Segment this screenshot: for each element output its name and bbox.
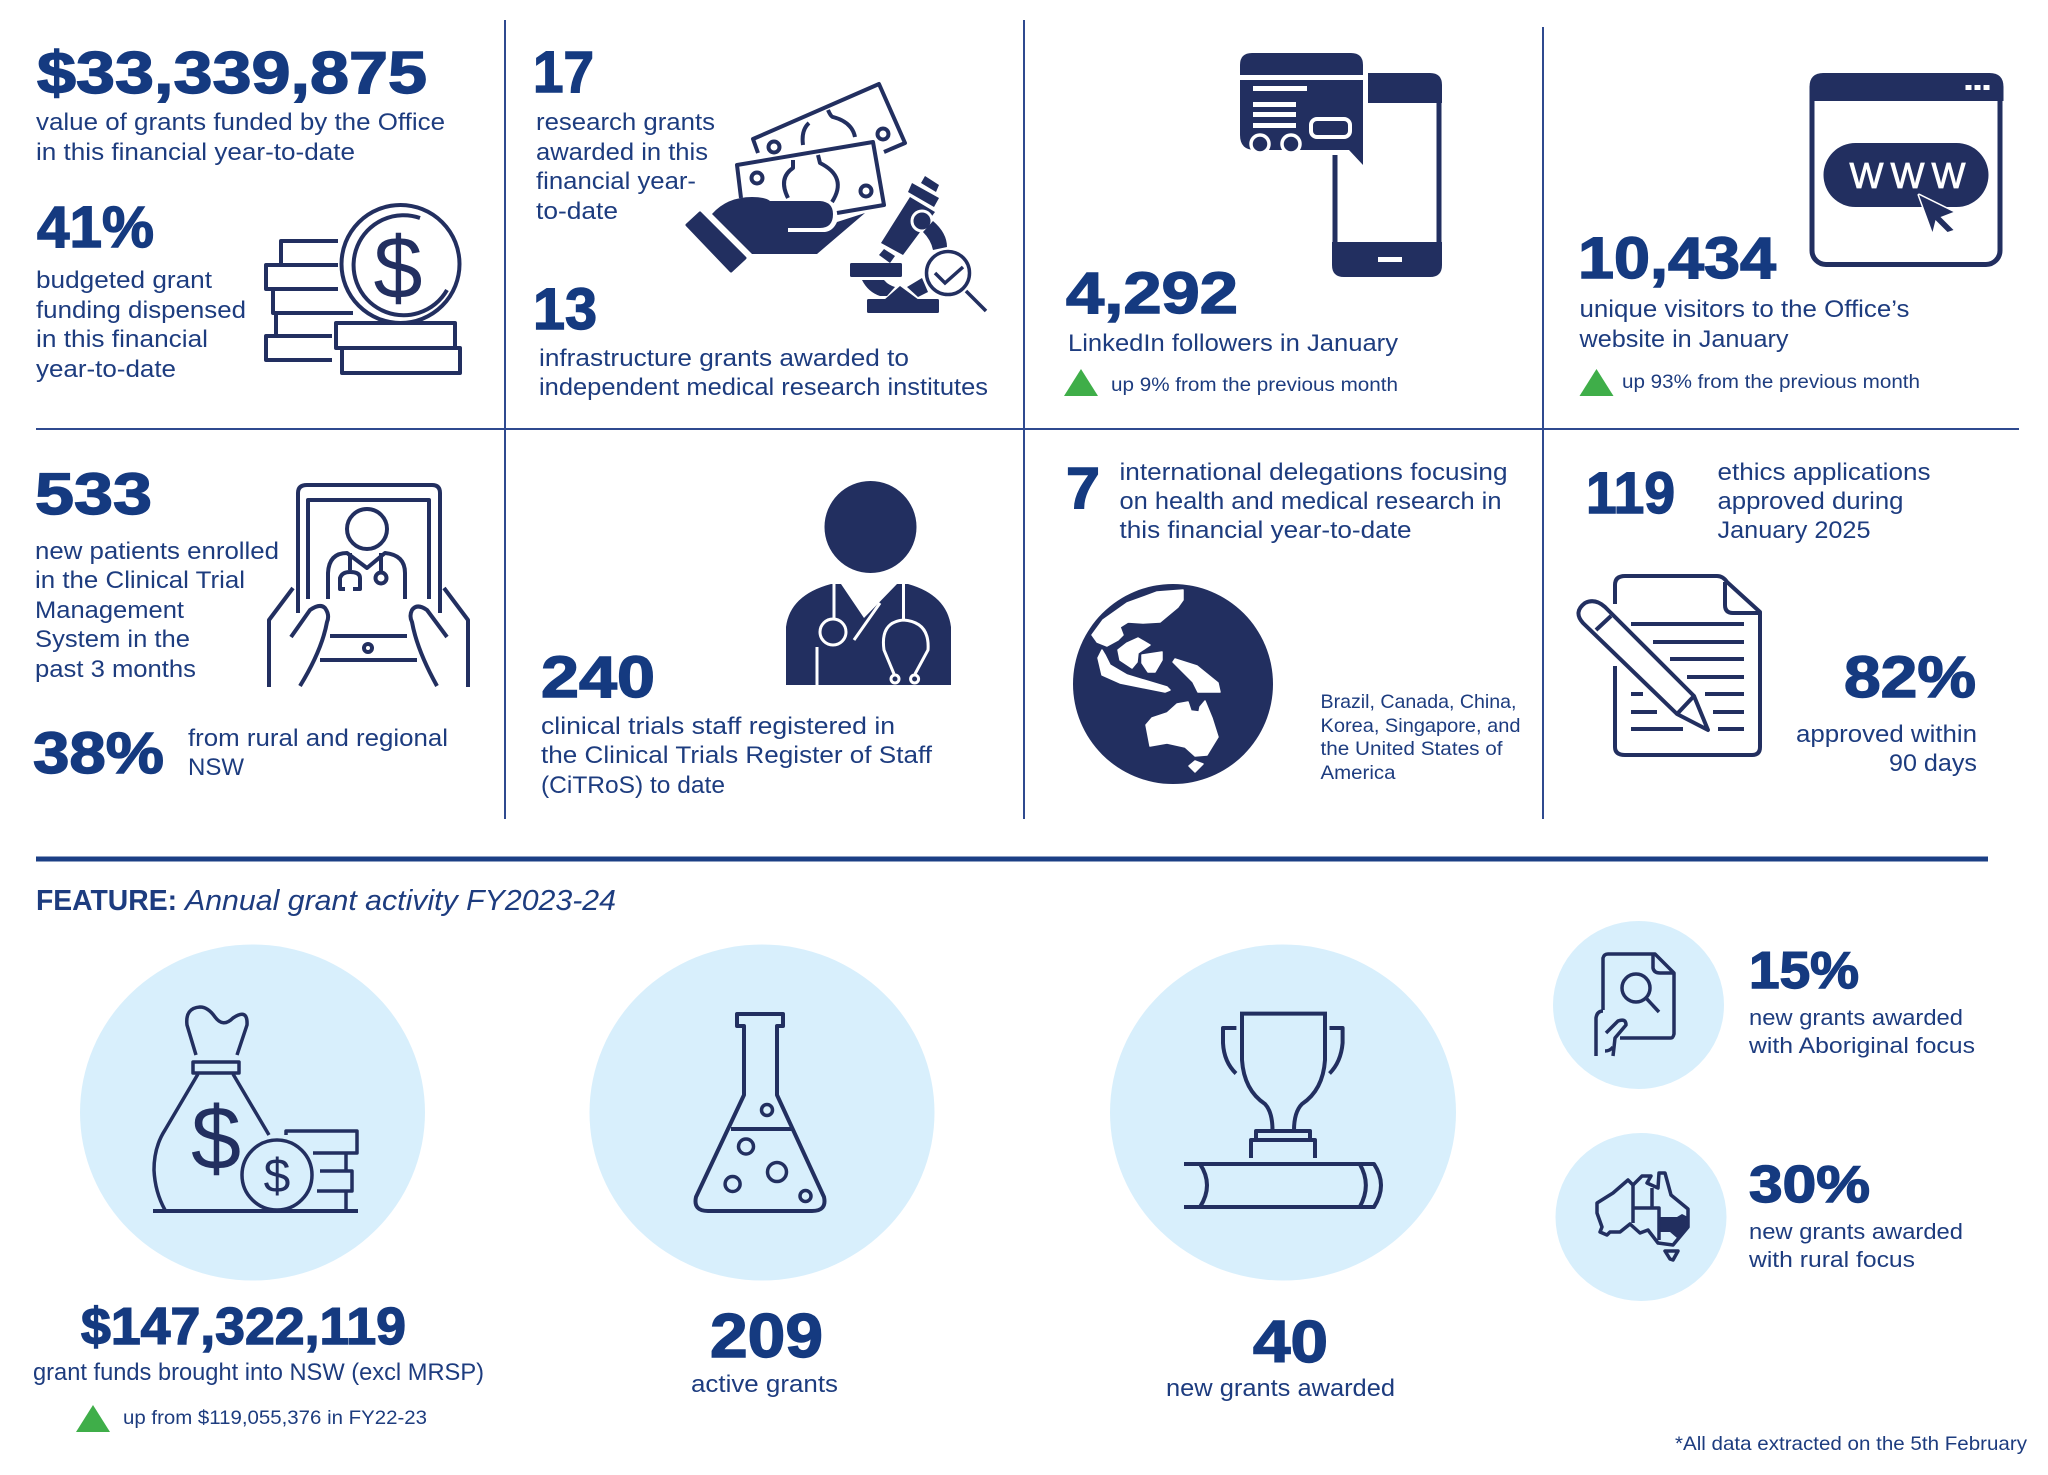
panel: international delegations [1066,456,1520,784]
text: unique visitors [1578,296,1910,353]
text: international delegations: this financial year-to-date [1120,517,1412,544]
icon: up arrow triangle [1064,369,1098,396]
text: international delegations: international delegations focusing [1120,459,1508,486]
text: new patients enrolled [35,538,279,683]
text: research grants: awarded in this [536,139,708,166]
icon: up arrow triangle [1580,369,1614,396]
icon: doctor with stethoscope [786,481,951,685]
stat: 15%: 15% [1749,942,1859,1000]
stat: 38%: 38% [33,721,164,786]
text: research grants: financial year- [536,168,696,195]
text: budgeted grant funding: in this financial [36,326,208,353]
text: approved within 90 days [1796,721,1977,777]
panel: clinical trials staff [541,481,951,799]
text: new grants awarded: new grants awarded [1166,1375,1395,1402]
text: grant funds brought into NSW: grant funds brought into NSW (excl MRSP) [33,1359,484,1386]
text: from rural and regional NSW: NSW [188,754,244,781]
text: unique visitors: website in January [1578,326,1788,353]
icon circle: flask [590,944,934,1280]
text: budgeted grant funding [36,267,246,383]
panel: Aboriginal focus [1553,921,1975,1089]
panel: rural focus [1556,1133,1963,1301]
icon: up arrow triangle [76,1405,110,1432]
text: new patients enrolled: Management [35,597,184,624]
text: infrastructure grants [539,345,988,401]
text: countries list: America [1320,762,1396,784]
text: rural focus: new grants awarded [1749,1219,1963,1244]
icon: coins and dollar [266,205,460,373]
text: Aboriginal focus: with Aboriginal focus [1748,1033,1975,1058]
icon circle: money bag and coins: $ [191,1089,241,1189]
stat: 119: 119 [1586,461,1675,526]
icon: coins and dollar: $ [374,218,422,317]
text: clinical trials staff: (CiTRoS) to date [541,772,725,799]
text: countries list [1320,691,1520,784]
text: ethics applications: ethics applications [1718,459,1930,486]
text: budgeted grant funding: year-to-date [36,356,176,383]
panel: clinical trial patients [33,462,468,786]
icon: hands holding tablet with doctor [269,485,468,687]
stat: 533: 533 [35,462,152,527]
stat: 209: 209 [710,1302,823,1371]
text: value of grants description: value of grants funded by the Office [36,109,445,136]
panel: grants funded value [36,40,460,383]
heading: feature title: Annual grant activity FY2023-24 [183,885,616,917]
stat: 82%: 82% [1844,645,1976,710]
text: research grants: research grants [536,109,715,136]
text: research grants: to-date [536,198,618,225]
text: clinical trials staff: clinical trials staff registered in [541,713,895,740]
text: clinical trials staff [541,713,932,799]
text: countries list: Korea, Singapore, and [1320,715,1520,737]
text: clinical trials staff: the Clinical Trials Register of Staff [541,742,932,769]
stat: 7: 7 [1066,456,1100,521]
icon: phone with chat bubble [1240,53,1442,277]
text: value of grants description [36,109,445,166]
panel: active grants [590,944,934,1398]
icon: document and pencil [1578,576,1760,755]
text: new patients enrolled: System in the [35,626,190,653]
stat: 240: 240 [541,645,655,710]
text: from rural and regional NSW [188,725,448,781]
text: unique visitors: unique visitors to the Office’s [1580,296,1910,323]
text: approved within 90 days: 90 days [1889,750,1977,777]
text: countries list: the United States of [1320,738,1503,760]
icon circle: trophy on book [1110,944,1456,1280]
text: infrastructure grants: independent medical research institutes [539,374,988,401]
divider: feature section rule [36,856,1988,862]
panel: grant funds brought in [33,944,484,1432]
text: ethics applications [1718,459,1930,544]
icon circle: money bag and coins [80,944,425,1280]
icon: microscope with magnifier [850,176,986,313]
text: from rural and regional NSW: from rural and regional [188,725,448,752]
text: LinkedIn followers: LinkedIn followers in January [1068,330,1398,357]
stat: 4,292: 4,292 [1066,261,1238,326]
text: active grants: active grants [691,1371,838,1398]
stat: $33,339,875: $33,339,875 [37,40,427,106]
text: infrastructure grants: infrastructure grants awarded to [539,345,909,372]
icon: globe [1073,584,1273,784]
text: new patients enrolled: new patients enrolled [35,538,279,565]
text: ethics applications: approved during [1718,488,1904,515]
footnote: *All data extracted on the 5th February [1675,1433,2027,1455]
text: ethics applications: January 2025 [1718,517,1870,544]
text: international delegations [1120,459,1508,544]
text: new patients enrolled: past 3 months [35,656,196,683]
text: new patients enrolled: in the Clinical Trial [35,567,245,594]
icon: hand holding banknotes [687,84,905,271]
text: rural focus: with rural focus [1748,1247,1915,1272]
icon circle: Australia map with NSW [1556,1133,1726,1301]
text: value of grants description: in this financial year-to-date [36,139,355,166]
panel: new grants awarded [1110,944,1456,1402]
text: budgeted grant funding: budgeted grant [36,267,212,294]
stat: 13: 13 [533,277,597,342]
text: Aboriginal focus: new grants awarded [1749,1005,1963,1030]
text: up from prior year: up from $119,055,376 in FY22-23 [123,1407,427,1429]
text: up 9%: up 9% from the previous month [1111,374,1398,396]
icon: browser window with www: WWW [1850,155,1966,196]
stat: 41%: 41% [37,195,154,260]
text: international delegations: on health and medical research in [1120,488,1502,515]
stat: 40: 40 [1253,1309,1328,1375]
text: Aboriginal focus [1748,1005,1975,1058]
stat: 10,434: 10,434 [1578,226,1776,291]
text: countries list: Brazil, Canada, China, [1320,691,1516,713]
text: research grants [536,109,715,225]
panel: LinkedIn followers [1064,53,1442,396]
panel: ethics applications [1578,459,1977,777]
panel: research and infrastructure grants [533,40,988,401]
stat: $147,322,119: $147,322,119 [81,1298,406,1356]
text: rural focus [1748,1219,1963,1272]
text: budgeted grant funding: funding dispensed [36,297,246,324]
stat: 30%: 30% [1749,1156,1870,1214]
panel: website visitors [1578,73,2004,396]
icon circle: money bag and coins: $ [264,1150,290,1203]
text: up 93%: up 93% from the previous month [1622,371,1920,393]
icon: browser window with www [1810,73,2004,264]
icon circle: document search [1553,921,1724,1089]
stat: 17: 17 [533,40,594,105]
heading: feature title: FEATURE: [36,885,177,917]
text: approved within 90 days: approved within [1796,721,1977,748]
